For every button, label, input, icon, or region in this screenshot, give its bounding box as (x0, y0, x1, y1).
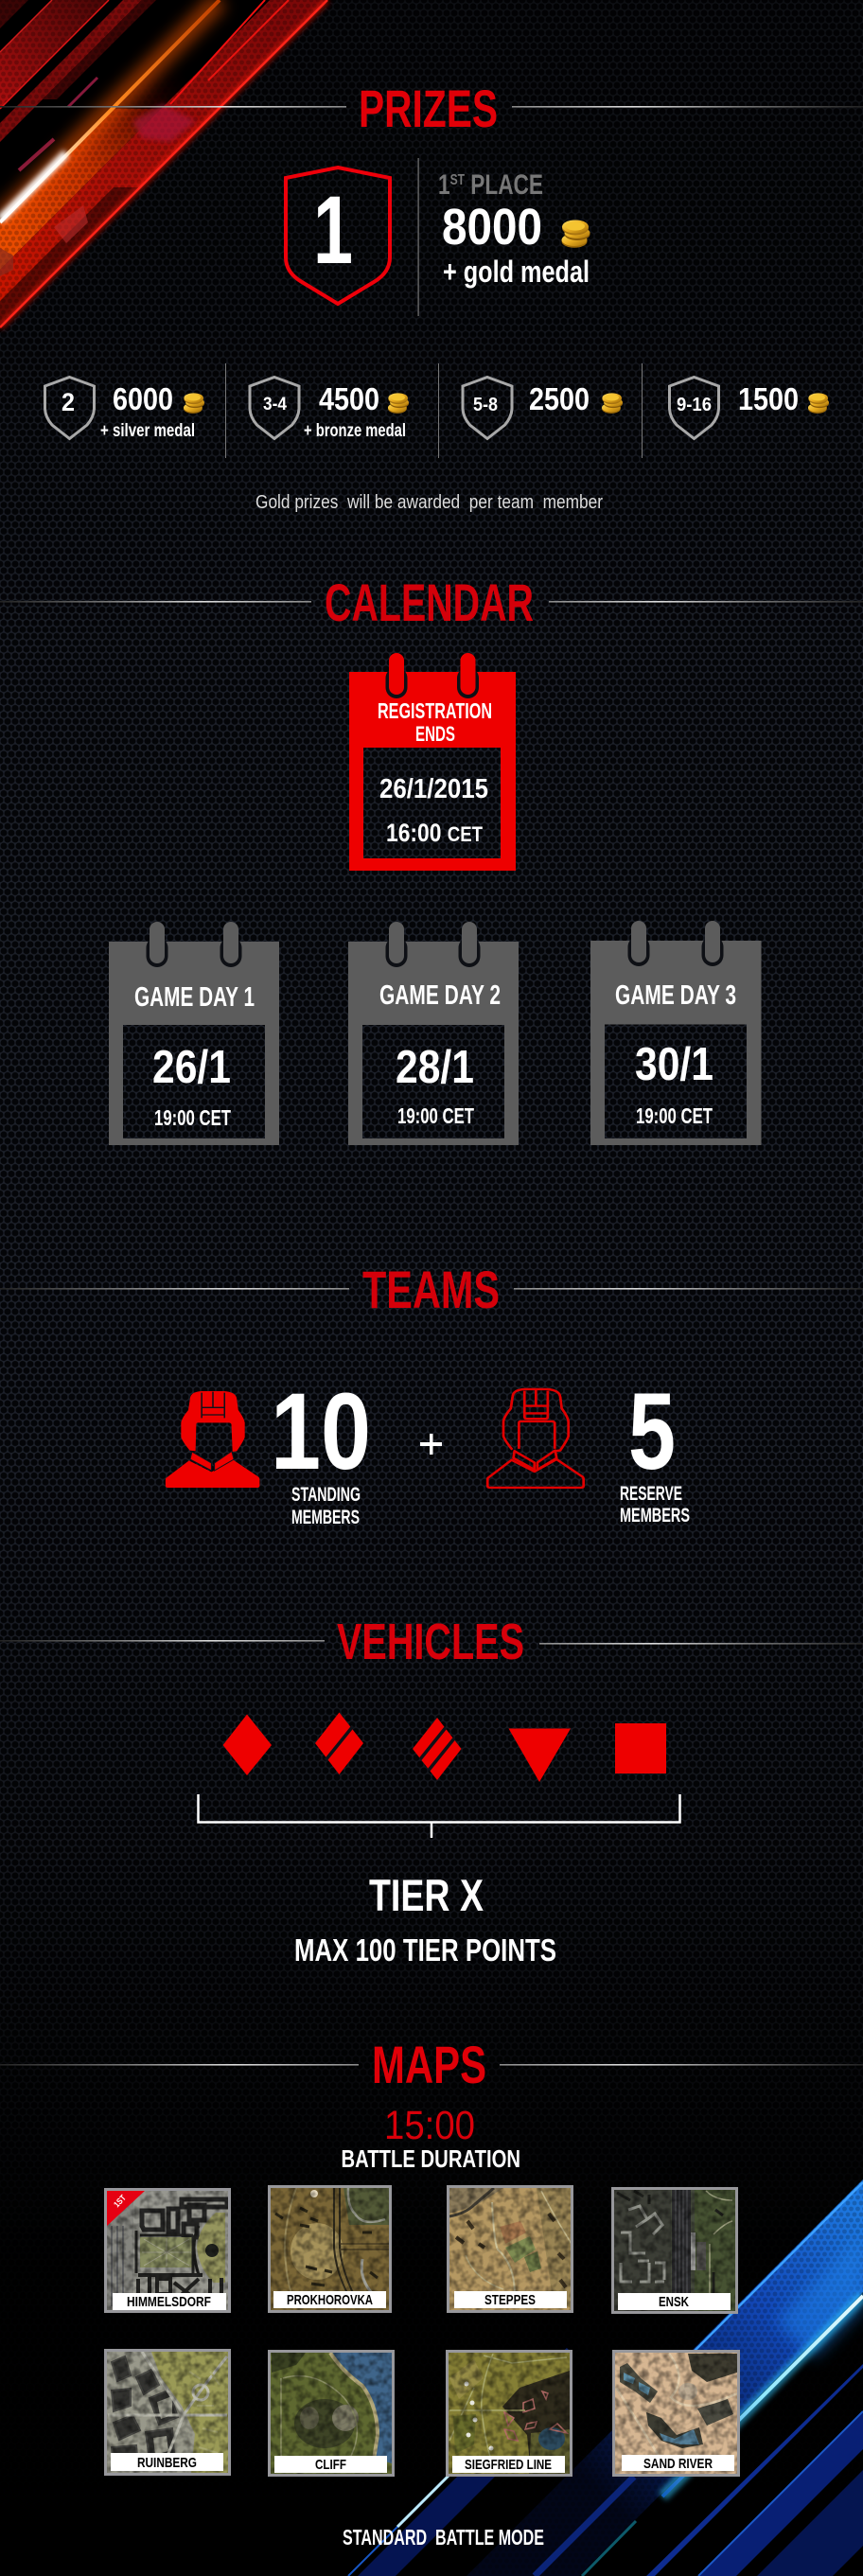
map: prokhorovka: PROKHOROVKA (287, 2292, 373, 2308)
bracket (199, 1794, 679, 1838)
battle mode label: STANDARD BATTLE MODE (343, 2525, 544, 2550)
calendar: game day 3 (590, 921, 761, 1145)
map: himmelsdorf (104, 2188, 231, 2313)
first place prize text: ST (450, 172, 465, 188)
map: siegfried line (446, 2350, 572, 2477)
icon: artillery (615, 1723, 666, 1773)
label: reserve members: RESERVE (620, 1483, 682, 1505)
prize: 5th-8th place (463, 377, 623, 439)
icon: medium tank (315, 1713, 363, 1774)
label: standing members: MEMBERS (291, 1507, 360, 1528)
label: reserve members: MEMBERS (620, 1505, 690, 1526)
calendar: registration ends: 26/1/2015 (379, 774, 488, 804)
note: gold prizes: Gold prizes will be awarded per team member (255, 492, 603, 513)
calendar: registration ends: 16:00 CET (386, 819, 483, 847)
calendar: game day 2: 19:00 CET (397, 1103, 474, 1128)
label: reserve members (620, 1483, 690, 1526)
battle duration value: 15:00 (384, 2103, 475, 2148)
heading: maps: MAPS (372, 2035, 486, 2094)
icon: first place shield: 1 (313, 176, 353, 284)
prize: 2nd place: 2 (62, 388, 75, 416)
calendar: game day 3: GAME DAY 3 (615, 980, 736, 1011)
icon: first place shield (286, 168, 390, 304)
calendar: game day 1: 26/1 (152, 1042, 231, 1093)
calendar: game day 2: 28/1 (396, 1042, 474, 1093)
prize: 9th-16th place (670, 377, 829, 439)
map: himmelsdorf: HIMMELSDORF (127, 2294, 211, 2310)
map: sand river (612, 2350, 740, 2477)
number: 10: 10 (271, 1371, 371, 1492)
map: steppes (447, 2185, 573, 2313)
map: cliff (268, 2350, 395, 2477)
section: teams (0, 1260, 863, 1528)
calendar: registration ends (349, 653, 516, 871)
icon: tank destroyer (509, 1728, 571, 1782)
section: vehicles (0, 1614, 863, 1967)
icon: standing member (filled tanker) (166, 1391, 259, 1488)
divider (642, 363, 643, 458)
tier x label: TIER X (369, 1870, 484, 1920)
divider (418, 158, 419, 316)
badge: 1st: 1ST (112, 2193, 128, 2209)
divider (438, 363, 439, 458)
prize: 2nd place: 6000 (113, 381, 173, 416)
tier points label: MAX 100 TIER POINTS (294, 1932, 556, 1967)
prize: 3rd-4th place: + bronze medal (304, 421, 406, 441)
calendar: game day 1: 19:00 CET (154, 1105, 231, 1130)
first place prize text: 1 (438, 169, 454, 201)
calendar: registration ends: REGISTRATION (378, 698, 492, 723)
prize: 3rd-4th place: 3-4 (263, 395, 287, 415)
prize: 3rd-4th place (250, 377, 409, 441)
map: cliff: CLIFF (315, 2457, 346, 2473)
calendar: game day 1 (109, 922, 279, 1145)
battle duration label: BATTLE DURATION (341, 2144, 520, 2173)
section: calendar (0, 573, 863, 1145)
prize: 9th-16th place: 9-16 (677, 395, 712, 415)
map: sand river: SAND RIVER (643, 2456, 713, 2472)
first place prize text: + gold medal (443, 255, 590, 289)
first place prize text: PLACE (465, 169, 543, 201)
number: 5: 5 (628, 1371, 676, 1492)
calendar: game day 2 (348, 922, 519, 1145)
decoration: blue light streaks (348, 2179, 863, 2576)
decoration: red light streaks (0, 0, 333, 333)
icon: light tank (223, 1715, 272, 1775)
prize: 2nd place (45, 377, 204, 441)
label: standing members (291, 1484, 361, 1528)
map: steppes: STEPPES (484, 2292, 536, 2308)
prize: 5th-8th place: 5-8 (473, 395, 498, 415)
map: ruinberg: RUINBERG (137, 2455, 197, 2471)
calendar: registration ends: ENDS (415, 722, 455, 746)
section: maps (0, 2035, 863, 2550)
heading: vehicles: VEHICLES (337, 1614, 524, 1670)
map: prokhorovka (268, 2185, 392, 2313)
icon: heavy tank (413, 1718, 462, 1780)
first place prize text: 8000 (442, 199, 542, 256)
calendar: game day 3: 30/1 (635, 1039, 713, 1090)
heading: calendar: CALENDAR (325, 573, 534, 632)
prize: 5th-8th place: 2500 (529, 381, 590, 416)
calendar: game day 2: GAME DAY 2 (379, 980, 501, 1011)
divider (225, 363, 226, 458)
map: ensk (611, 2187, 738, 2314)
label: standing members: STANDING (291, 1484, 361, 1506)
calendar: game day 3: 19:00 CET (636, 1103, 713, 1128)
map: ruinberg (104, 2349, 231, 2476)
icon: plus (420, 1434, 442, 1455)
icon: reserve member (outlined tanker) (487, 1389, 584, 1488)
heading: teams: TEAMS (362, 1260, 500, 1319)
calendar: game day 1: GAME DAY 1 (134, 982, 255, 1013)
first place prize text (438, 169, 590, 289)
prize: 2nd place: + silver medal (100, 421, 195, 441)
heading: prizes: PRIZES (359, 79, 498, 138)
map: siegfried line: SIEGFRIED LINE (465, 2457, 552, 2473)
map: ensk: ENSK (659, 2294, 689, 2310)
prize: 9th-16th place: 1500 (738, 381, 799, 416)
section: prizes (0, 79, 863, 513)
prize: 3rd-4th place: 4500 (319, 381, 379, 416)
